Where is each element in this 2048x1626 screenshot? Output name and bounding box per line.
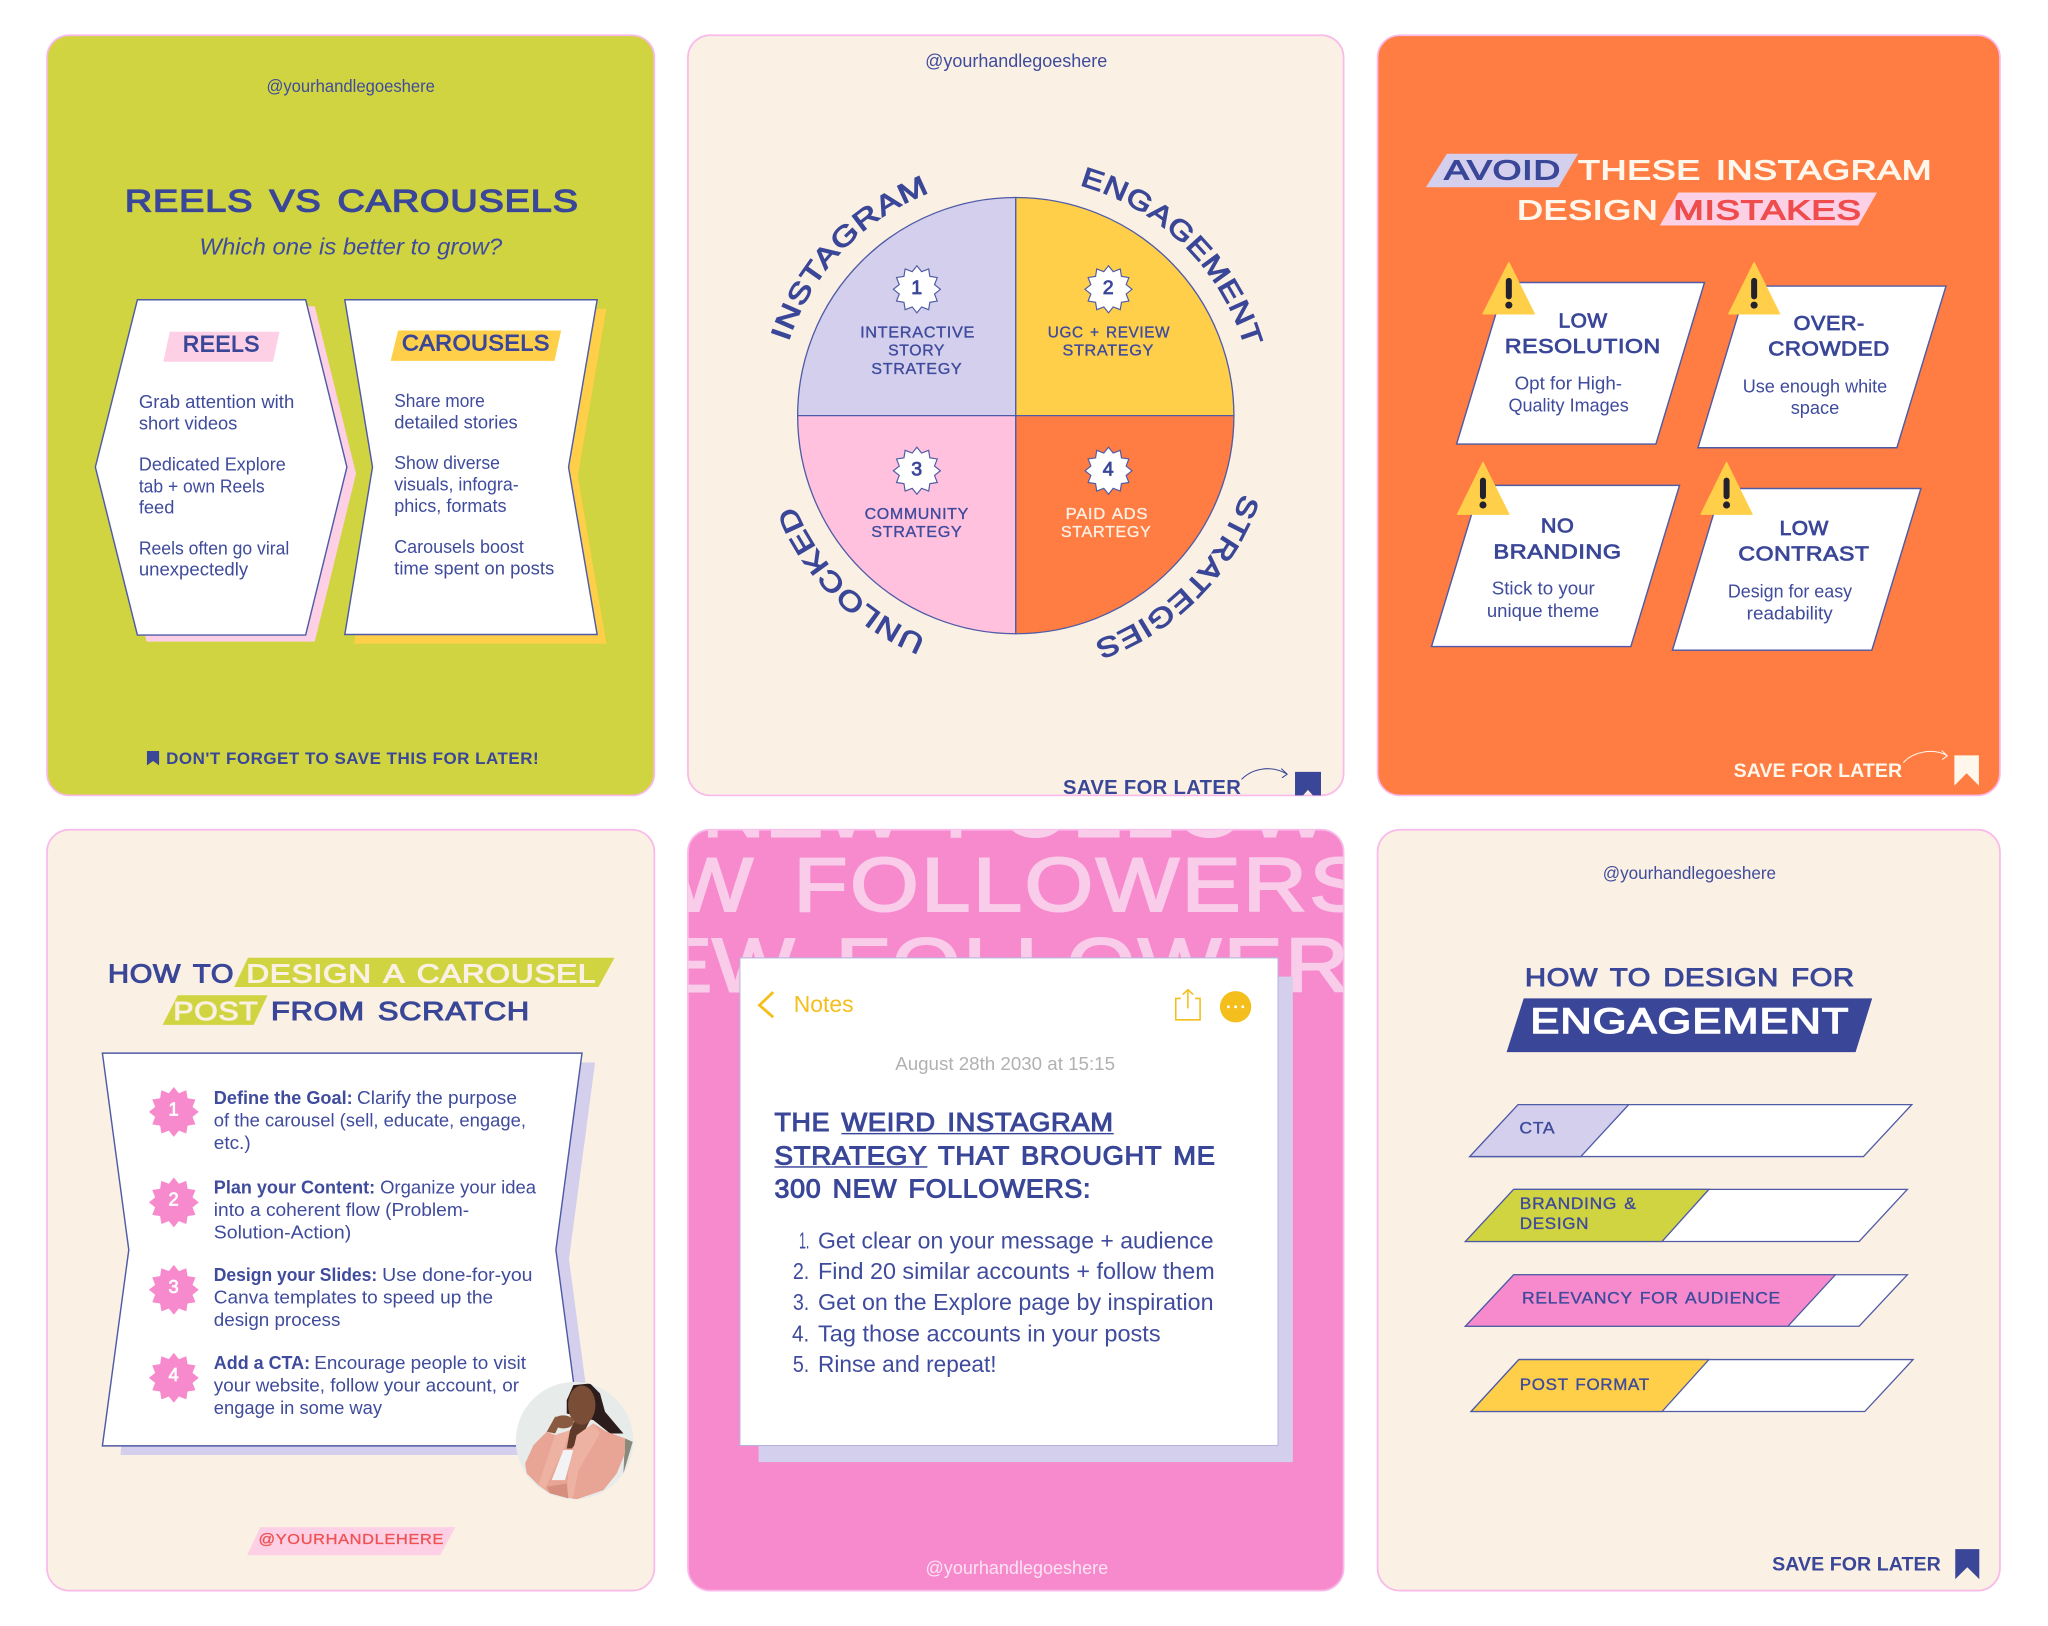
numbered list: 1. xyxy=(799,1227,809,1253)
save for later xyxy=(1064,768,1321,796)
card: low resolution: Quality Images xyxy=(1508,395,1629,416)
bar: branding and design: BRANDING & xyxy=(1520,1195,1637,1213)
step 3: design process xyxy=(214,1309,340,1330)
quadrant 3: COMMUNITY xyxy=(865,506,969,523)
panel: avoid design mistakes xyxy=(1378,35,2000,795)
heading: MISTAKES xyxy=(1673,195,1862,226)
card: carousels: detailed stories xyxy=(394,411,518,432)
step 4: 4 xyxy=(169,1364,179,1385)
card: overcrowded xyxy=(1698,263,1946,448)
step 2: Organize your idea xyxy=(380,1177,537,1198)
quadrant 4: STARTEGY xyxy=(1061,524,1151,541)
numbered list: Get on the Explore page by inspiration xyxy=(818,1289,1214,1315)
handle: @yourhandlegoeshere xyxy=(926,1557,1108,1578)
bar: post format: POST FORMAT xyxy=(1520,1376,1650,1394)
numbered list: 2. xyxy=(793,1258,809,1284)
card: reels: tab + own Reels xyxy=(139,475,265,496)
quadrant 1: STRATEGY xyxy=(871,361,962,378)
step 4: your website, follow your account, or xyxy=(214,1374,519,1395)
card: carousels: phics, formats xyxy=(394,495,507,516)
step 1: etc.) xyxy=(214,1132,251,1153)
handle badge xyxy=(247,1527,455,1555)
curved label: unlocked: UNLOCKED xyxy=(780,510,922,654)
card: reels: unexpectedly xyxy=(139,558,249,579)
panel: how to design a carousel xyxy=(47,830,654,1591)
handle badge: @YOURHANDLEHERE xyxy=(258,1531,444,1548)
card: low contrast: Design for easy xyxy=(1728,580,1853,601)
note heading: THAT BROUGHT ME xyxy=(938,1142,1216,1170)
numbered list: Find 20 similar accounts + follow them xyxy=(818,1258,1215,1284)
card: low resolution: Opt for High- xyxy=(1515,373,1622,394)
heading: HOW TO DESIGN FOR xyxy=(1525,965,1855,992)
background repeated text: FOLLOWERS xyxy=(945,769,1522,854)
date: August 28th 2030 at 15:15 xyxy=(895,1053,1115,1074)
card: reels: Reels often go viral xyxy=(139,537,289,558)
step 4: Add a CTA: xyxy=(214,1352,310,1373)
wheel chart xyxy=(798,197,1234,634)
handle: @yourhandlegoeshere xyxy=(1603,863,1776,883)
heading: DESIGN xyxy=(1517,195,1659,226)
quadrant 2: 2 xyxy=(1103,277,1114,299)
heading: DESIGN A CAROUSEL xyxy=(246,958,596,988)
card: no branding: unique theme xyxy=(1487,600,1599,621)
card: no branding: Stick to your xyxy=(1492,578,1595,599)
panel: notes strategy xyxy=(687,828,1344,1592)
step 3: 3 xyxy=(169,1276,179,1297)
step 2: into a coherent flow (Problem- xyxy=(214,1199,469,1220)
card: carousels: visuals, infogra- xyxy=(394,474,519,495)
curved label: engagement: ENGAGEMENT xyxy=(1081,167,1264,342)
note heading: WEIRD INSTAGRAM xyxy=(841,1109,1114,1137)
card: no branding xyxy=(1432,462,1680,647)
heading xyxy=(108,958,615,1026)
note heading: STRATEGY xyxy=(775,1142,927,1170)
steps card xyxy=(102,1053,595,1455)
icon: back chevron xyxy=(760,992,773,1017)
numbered list: Tag those accounts in your posts xyxy=(818,1320,1161,1346)
step 3: Canva templates to speed up the xyxy=(214,1286,493,1307)
note card xyxy=(740,958,1293,1462)
card: carousels: time spent on posts xyxy=(394,558,554,579)
quadrant 2: UGC + REVIEW xyxy=(1048,324,1170,341)
panel: engagement strategies wheel xyxy=(687,34,1344,796)
numbered list: 5. xyxy=(793,1351,809,1377)
card: carousels xyxy=(345,300,606,644)
numbered list: 3. xyxy=(793,1289,809,1315)
bar: branding and design: DESIGN xyxy=(1520,1215,1589,1233)
heading: REELS VS CAROUSELS xyxy=(125,184,579,219)
save reminder: DON'T FORGET TO SAVE THIS FOR LATER! xyxy=(166,749,539,768)
step 2 xyxy=(149,1177,537,1242)
subtitle: Which one is better to grow? xyxy=(199,234,502,260)
heading: HOW TO xyxy=(108,958,234,988)
background repeated text: NEW xyxy=(702,769,906,854)
curved label: strategies: STRATEGIES xyxy=(1096,496,1258,658)
card: low contrast: CONTRAST xyxy=(1738,543,1870,565)
card: overcrowded: CROWDED xyxy=(1768,339,1890,361)
step 2: 2 xyxy=(169,1189,179,1210)
heading: ENGAGEMENT xyxy=(1530,1002,1849,1041)
card: low contrast: readability xyxy=(1747,602,1834,623)
card: low resolution: LOW xyxy=(1558,310,1608,332)
step 1: 1 xyxy=(169,1098,179,1119)
card: reels: Dedicated Explore xyxy=(139,454,286,475)
step 1 xyxy=(149,1087,526,1153)
background repeated text: NEW xyxy=(549,843,754,928)
step 1: of the carousel (sell, educate, engage, xyxy=(214,1109,526,1130)
panel: how to design for engagement xyxy=(1378,830,2000,1591)
card: carousels: Show diverse xyxy=(394,452,500,473)
card: no branding: NO xyxy=(1541,516,1574,538)
step 3: Use done-for-you xyxy=(382,1264,533,1285)
background repeated text: FOLLOWERS xyxy=(836,924,1413,1009)
numbered list: Rinse and repeat! xyxy=(818,1351,997,1377)
heading xyxy=(1507,965,1872,1052)
handle: @yourhandlegoeshere xyxy=(925,50,1107,71)
card: low contrast: LOW xyxy=(1780,518,1829,540)
note heading: 300 NEW FOLLOWERS: xyxy=(775,1176,1091,1204)
icon: bookmark xyxy=(147,751,159,765)
heading: THESE INSTAGRAM xyxy=(1578,154,1932,185)
portrait photo xyxy=(515,1381,635,1501)
note heading xyxy=(775,1109,1216,1204)
card: low resolution: RESOLUTION xyxy=(1505,336,1661,358)
heading: FROM SCRATCH xyxy=(271,996,530,1026)
card: reels: REELS xyxy=(183,331,260,356)
background repeated text: FOLLOWERS xyxy=(794,843,1371,928)
card: carousels: Share more xyxy=(394,390,485,411)
step 4: Encourage people to visit xyxy=(314,1352,526,1373)
heading xyxy=(1426,154,1932,226)
card: reels: Grab attention with xyxy=(139,391,294,412)
save for later xyxy=(1772,1549,1979,1579)
panel: reels vs carousels xyxy=(47,35,654,795)
quadrant 3 xyxy=(865,447,969,541)
background repeated text xyxy=(688,830,1344,992)
quadrant 1: INTERACTIVE xyxy=(860,324,975,341)
card: overcrowded: Use enough white xyxy=(1743,375,1887,396)
quadrant 3: STRATEGY xyxy=(871,524,962,541)
note heading: THE xyxy=(775,1109,830,1137)
curved label: instagram: INSTAGRAM xyxy=(770,176,928,340)
step 2: Solution-Action) xyxy=(214,1221,351,1242)
background repeated text: NEW xyxy=(591,924,795,1009)
save for later: SAVE FOR LATER xyxy=(1772,1553,1941,1575)
heading: AVOID xyxy=(1444,154,1561,185)
save for later xyxy=(1734,751,1979,786)
quadrant 2 xyxy=(1048,266,1170,360)
step 2: Plan your Content: xyxy=(214,1177,375,1198)
bar: CTA: CTA xyxy=(1519,1120,1555,1138)
step 1: Define the Goal: xyxy=(214,1087,353,1108)
card: reels: feed xyxy=(139,497,174,518)
bar: post format xyxy=(1471,1360,1913,1412)
bar: CTA xyxy=(1470,1105,1912,1157)
card: no branding: BRANDING xyxy=(1494,542,1622,564)
step 3: Design your Slides: xyxy=(214,1264,377,1285)
heading: POST xyxy=(173,996,258,1026)
save for later: SAVE FOR LATER xyxy=(1063,777,1241,799)
bar: branding and design xyxy=(1465,1189,1907,1241)
step 4: engage in some way xyxy=(214,1397,383,1418)
card: carousels: Carousels boost xyxy=(394,536,524,557)
numbered list: 4. xyxy=(792,1320,809,1346)
save for later: SAVE FOR LATER xyxy=(1734,760,1902,782)
card: overcrowded: OVER- xyxy=(1794,313,1865,335)
card: overcrowded: space xyxy=(1791,397,1839,418)
step 1: Clarify the purpose xyxy=(357,1087,517,1108)
card: low contrast xyxy=(1672,462,1921,650)
card: carousels: CAROUSELS xyxy=(402,330,550,355)
bar: relevancy for audience xyxy=(1465,1275,1907,1326)
quadrant 4: PAID ADS xyxy=(1066,506,1148,523)
quadrant 1: 1 xyxy=(911,277,923,299)
quadrant 1: STORY xyxy=(888,343,945,360)
notes label: Notes xyxy=(794,991,854,1017)
step 4 xyxy=(149,1352,526,1418)
card: low resolution xyxy=(1457,263,1704,444)
card: reels: short videos xyxy=(139,412,237,433)
quadrant 4: 4 xyxy=(1103,458,1114,480)
bar: relevancy for audience: RELEVANCY FOR AUDIENCE xyxy=(1522,1289,1781,1307)
quadrant 4 xyxy=(1061,447,1151,541)
numbered list xyxy=(792,1227,1215,1377)
quadrant 2: STRATEGY xyxy=(1063,343,1154,360)
numbered list: Get clear on your message + audience xyxy=(818,1227,1214,1253)
quadrant 1 xyxy=(860,266,975,378)
handle: @yourhandlegoeshere xyxy=(266,76,435,96)
card: reels xyxy=(95,300,356,642)
step 3 xyxy=(149,1264,533,1330)
icon: share xyxy=(1176,990,1200,1020)
icon: more xyxy=(1220,991,1251,1022)
quadrant 3: 3 xyxy=(911,458,923,480)
